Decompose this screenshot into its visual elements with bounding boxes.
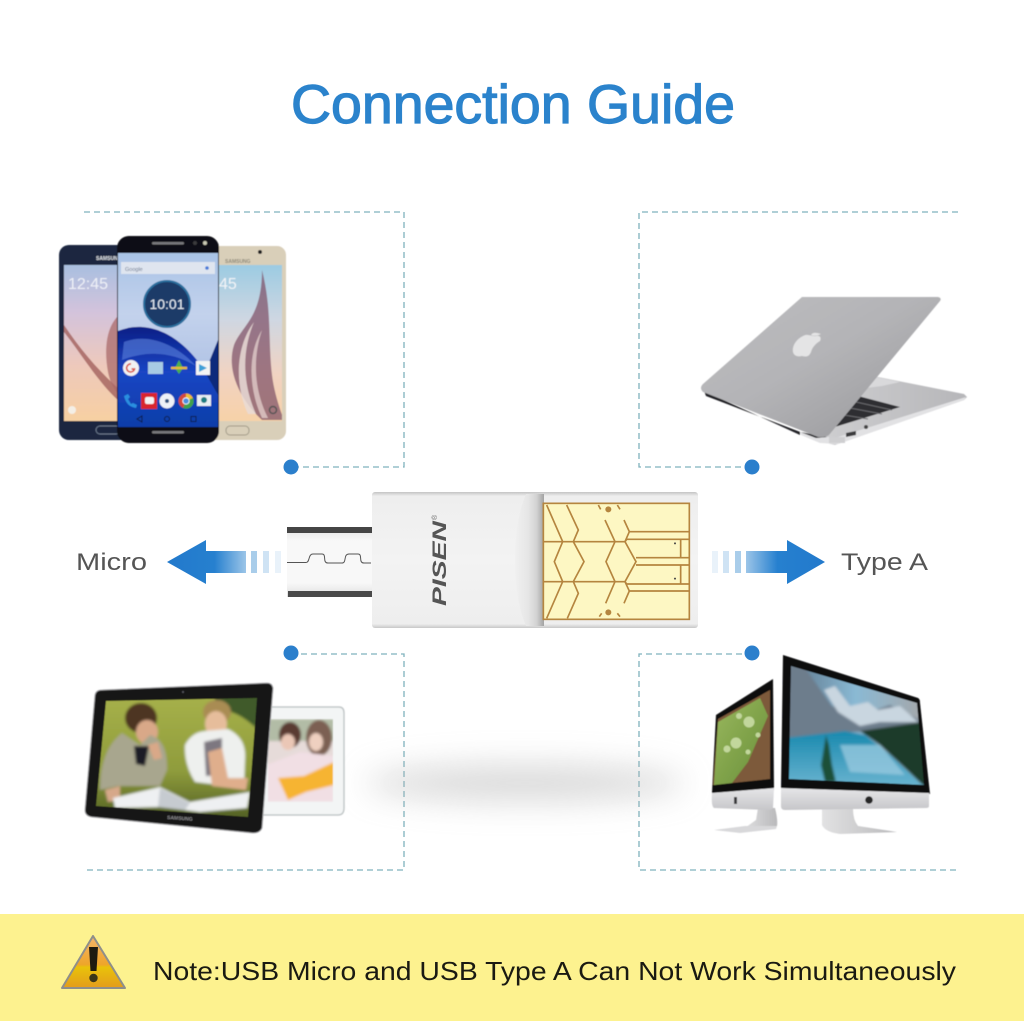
phone: dark Samsung [58, 244, 122, 441]
icon: warning triangle [62, 936, 125, 988]
large iMac [781, 655, 930, 834]
note text: Note:USB Micro and USB Type A Can Not Work Simultaneously [153, 956, 956, 986]
chip recess [515, 494, 544, 626]
phone: gold Samsung: 45 [219, 276, 237, 293]
marker: laptop [744, 460, 760, 474]
label: Micro: Micro [76, 549, 147, 576]
laptop lid [701, 297, 941, 437]
tablet: black front [85, 683, 273, 833]
connector: adapter [287, 492, 698, 628]
phone: front Moto [117, 236, 219, 443]
laptop front edge [800, 397, 966, 444]
keyboard [830, 396, 900, 428]
tablet: white back [262, 707, 344, 815]
marker: tablets [284, 646, 298, 660]
phone: front Moto: 10:01 [149, 296, 185, 312]
open book [113, 787, 250, 812]
panel: tablets frame [84, 646, 404, 870]
floor shadow [365, 765, 685, 801]
image: desktop computers [712, 655, 930, 834]
gold chip contacts [543, 503, 689, 619]
panel: laptop frame [639, 212, 958, 474]
apple logo [793, 333, 821, 357]
arrow: right to Type A [712, 540, 825, 584]
panel: desktops frame [639, 646, 958, 870]
marker: phones [284, 460, 298, 474]
phone: gold Samsung: SAMSUNG [225, 259, 251, 265]
image: three smartphones [59, 236, 286, 443]
arrow: left to Micro [167, 540, 281, 584]
adapter body [372, 492, 698, 628]
image: tablets [85, 683, 344, 833]
label: Type A: Type A [841, 549, 928, 576]
marker: desktops [744, 646, 760, 660]
girl right [203, 700, 231, 724]
registered mark: ® [431, 514, 439, 520]
phone: gold Samsung [205, 246, 286, 440]
note banner [0, 914, 1024, 1021]
tablet: black front: SAMSUNG [167, 815, 193, 823]
girl left [125, 703, 157, 733]
laptop base [818, 376, 967, 445]
image: laptop [701, 297, 967, 445]
phone: dark Samsung: SAMSUNG [96, 256, 122, 262]
panel: phones frame [84, 212, 404, 474]
small iMac [712, 679, 777, 833]
micro USB plug [287, 527, 372, 597]
laptop hinge shadow [704, 391, 827, 438]
phone: dark Samsung: 12:45 [68, 276, 108, 293]
title: Connection Guide [291, 73, 735, 135]
PISEN logo: PISEN [430, 519, 451, 606]
phone: front Moto: Google [125, 267, 143, 273]
